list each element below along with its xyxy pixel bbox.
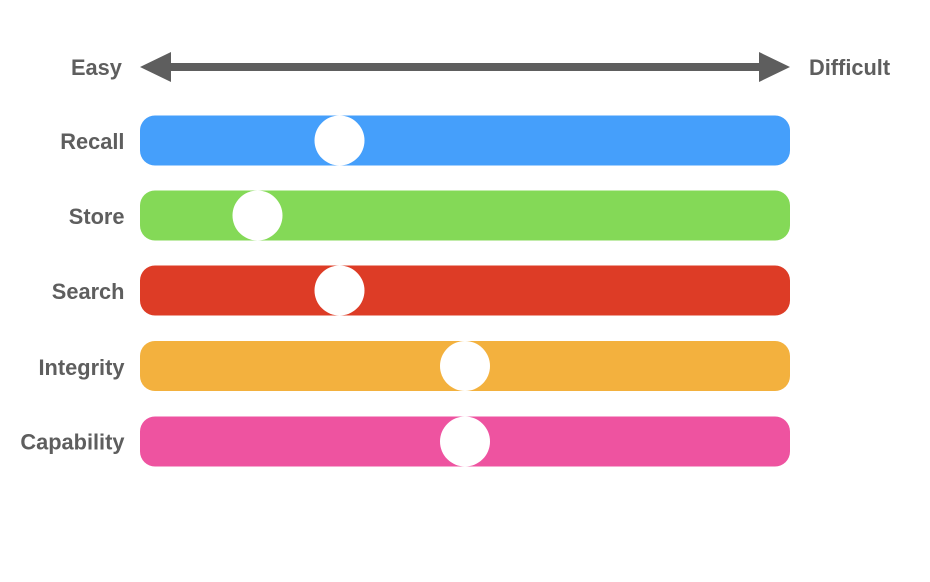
row: Integrity: Integrity: [38, 355, 124, 380]
row: Capability: [20, 416, 790, 466]
row: Store: [69, 190, 790, 240]
label: Difficult: Difficult: [809, 55, 890, 80]
row: Recall: [60, 116, 790, 166]
label: Easy: Easy: [71, 55, 122, 80]
row: Store: Store: [69, 204, 124, 229]
row: Integrity: [38, 341, 790, 391]
row: Capability: Capability: [20, 430, 124, 454]
row: Search: [52, 266, 790, 316]
arrow: easy to difficult: [140, 52, 790, 82]
row: Recall: Recall: [60, 129, 124, 154]
row: Search: Search: [52, 279, 124, 304]
